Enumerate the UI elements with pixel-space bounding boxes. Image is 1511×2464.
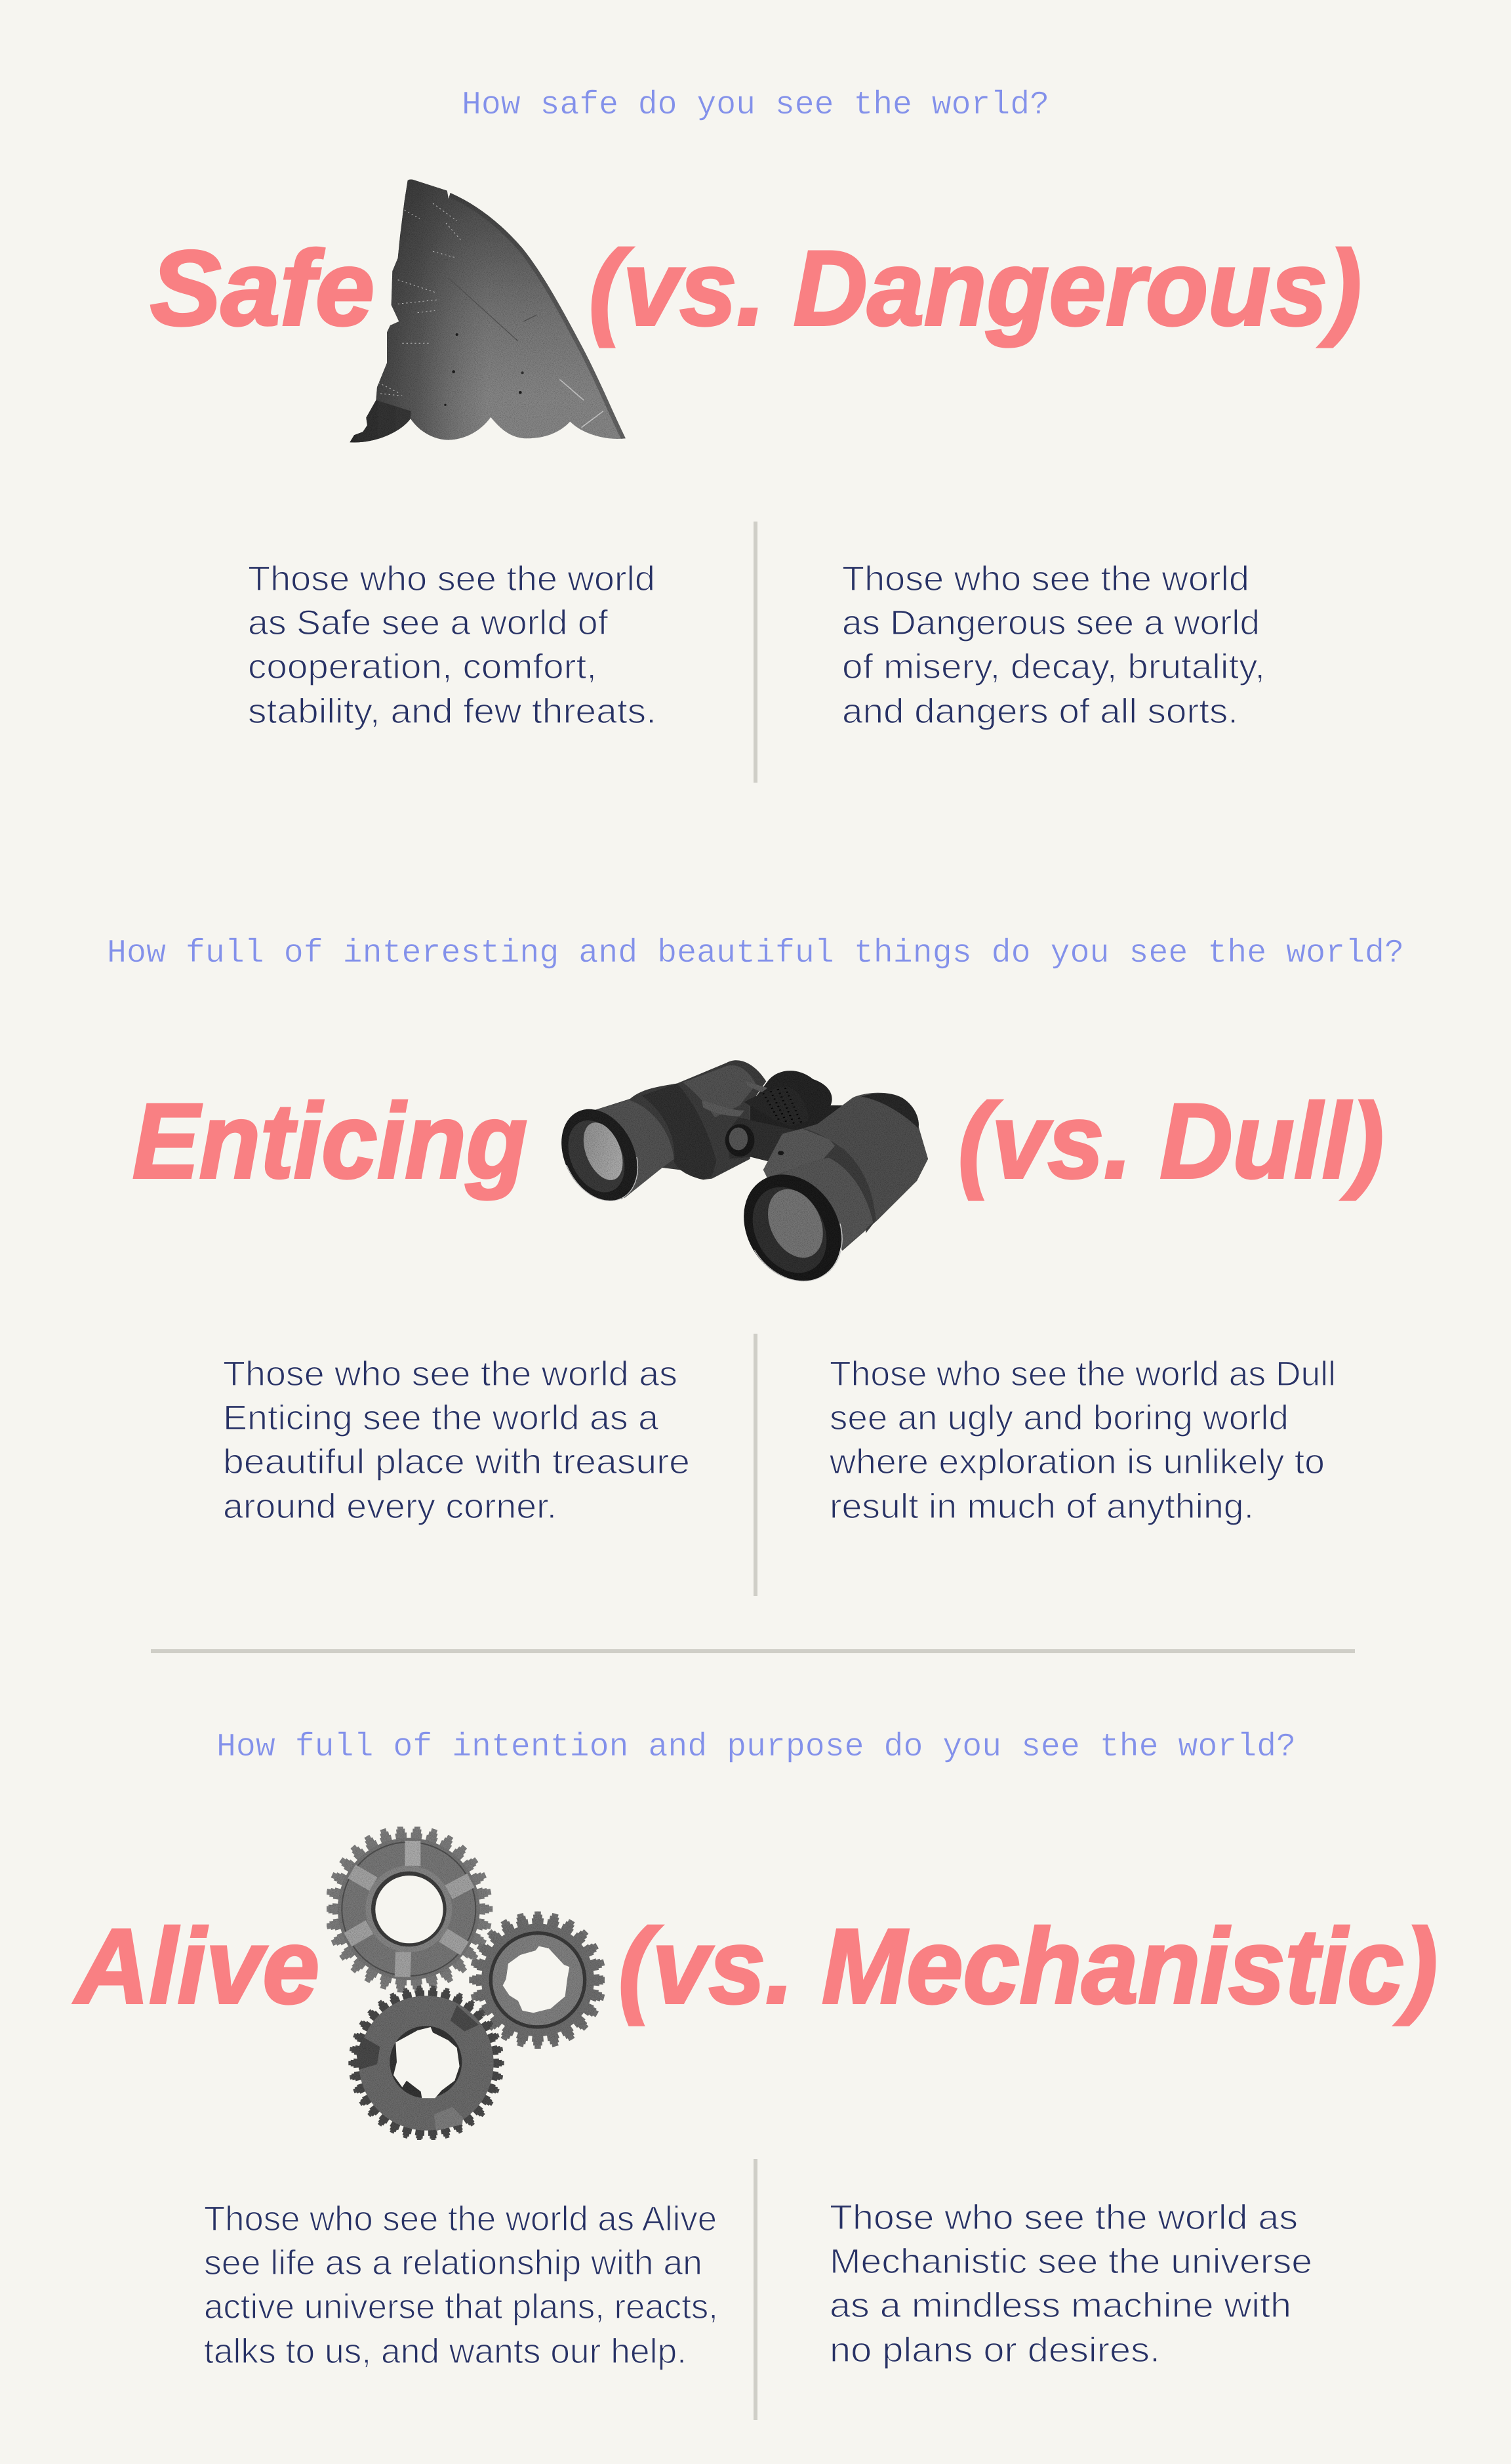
text: mechanistic description: Those who see the world as xyxy=(830,2198,1298,2237)
bridge behind barrels xyxy=(750,1071,844,1161)
question: safe: How safe do you see the world? xyxy=(462,87,1049,124)
text: enticing description xyxy=(223,1355,690,1526)
text: dangerous description: of misery, decay, brutality, xyxy=(842,647,1265,686)
panel: alive vs mechanistic xyxy=(73,1729,1438,2420)
gear: top left xyxy=(327,1827,491,1991)
text: alive description xyxy=(204,2200,718,2371)
gear: right xyxy=(471,1913,605,2047)
left barrel xyxy=(592,1060,766,1199)
text: enticing description: beautiful place with treasure xyxy=(223,1443,690,1481)
icon: shark fin xyxy=(350,180,626,442)
text: mechanistic description: no plans or desires. xyxy=(830,2331,1160,2370)
focus wheel and hinge xyxy=(727,1117,817,1161)
text: dangerous description: as Dangerous see a world xyxy=(842,604,1260,642)
divider: enticing xyxy=(754,1334,757,1596)
heading: versus dangerous: (vs. Dangerous) xyxy=(589,229,1361,348)
text: dull description: result in much of anything. xyxy=(830,1487,1254,1526)
heading: safe: Safe xyxy=(150,229,374,348)
text: safe description: stability, and few threats. xyxy=(248,692,656,731)
text: mechanistic description xyxy=(830,2198,1312,2370)
text: mechanistic description: as a mindless machine with xyxy=(830,2286,1291,2325)
text: dangerous description: Those who see the world xyxy=(842,560,1249,598)
heading: versus mechanistic: (vs. Mechanistic) xyxy=(618,1907,1438,2026)
text: enticing description: Enticing see the world as a xyxy=(223,1399,659,1437)
text: dangerous description xyxy=(842,560,1265,731)
heading: enticing: Enticing xyxy=(132,1082,527,1201)
gear holes xyxy=(375,1876,569,2098)
text: dull description: see an ugly and boring world xyxy=(830,1399,1289,1437)
text: dull description: Those who see the world as Dull xyxy=(830,1355,1336,1393)
icon: gears xyxy=(327,1827,605,2140)
right front ring xyxy=(729,1167,856,1289)
text: dull description: where exploration is unlikely to xyxy=(829,1443,1325,1481)
panel: enticing vs dull xyxy=(107,935,1404,1596)
text: safe description: as Safe see a world of xyxy=(248,604,608,642)
text: alive description: active universe that plans, reacts, xyxy=(204,2288,718,2326)
text: safe description: Those who see the world xyxy=(248,560,655,598)
text: dull description xyxy=(829,1355,1336,1526)
text: enticing description: Those who see the world as xyxy=(223,1355,677,1393)
text: alive description: Those who see the world as Alive xyxy=(204,2200,717,2238)
heading: versus dull: (vs. Dull) xyxy=(958,1082,1384,1201)
divider: safe xyxy=(754,522,757,783)
left front ring xyxy=(550,1103,649,1207)
text: alive description: see life as a relationship with an xyxy=(204,2244,702,2282)
icon: binoculars xyxy=(550,1060,928,1289)
gear: bottom xyxy=(350,1986,503,2140)
text: dangerous description: and dangers of all sorts. xyxy=(842,692,1238,731)
heading: alive: Alive xyxy=(73,1907,319,2026)
question: alive: How full of intention and purpose do you see the world? xyxy=(216,1729,1296,1766)
question: enticing: How full of interesting and beautiful things do you see the world? xyxy=(107,935,1404,972)
text: safe description xyxy=(248,560,656,731)
divider: alive xyxy=(754,2159,757,2420)
gear textures xyxy=(327,1827,605,2140)
text: mechanistic description: Mechanistic see the universe xyxy=(830,2242,1312,2281)
text: enticing description: around every corner. xyxy=(223,1487,557,1526)
right barrel xyxy=(763,1093,928,1251)
text: safe description: cooperation, comfort, xyxy=(248,647,597,686)
panel: safe vs dangerous xyxy=(150,87,1361,783)
text: alive description: talks to us, and wants our help. xyxy=(204,2332,687,2371)
